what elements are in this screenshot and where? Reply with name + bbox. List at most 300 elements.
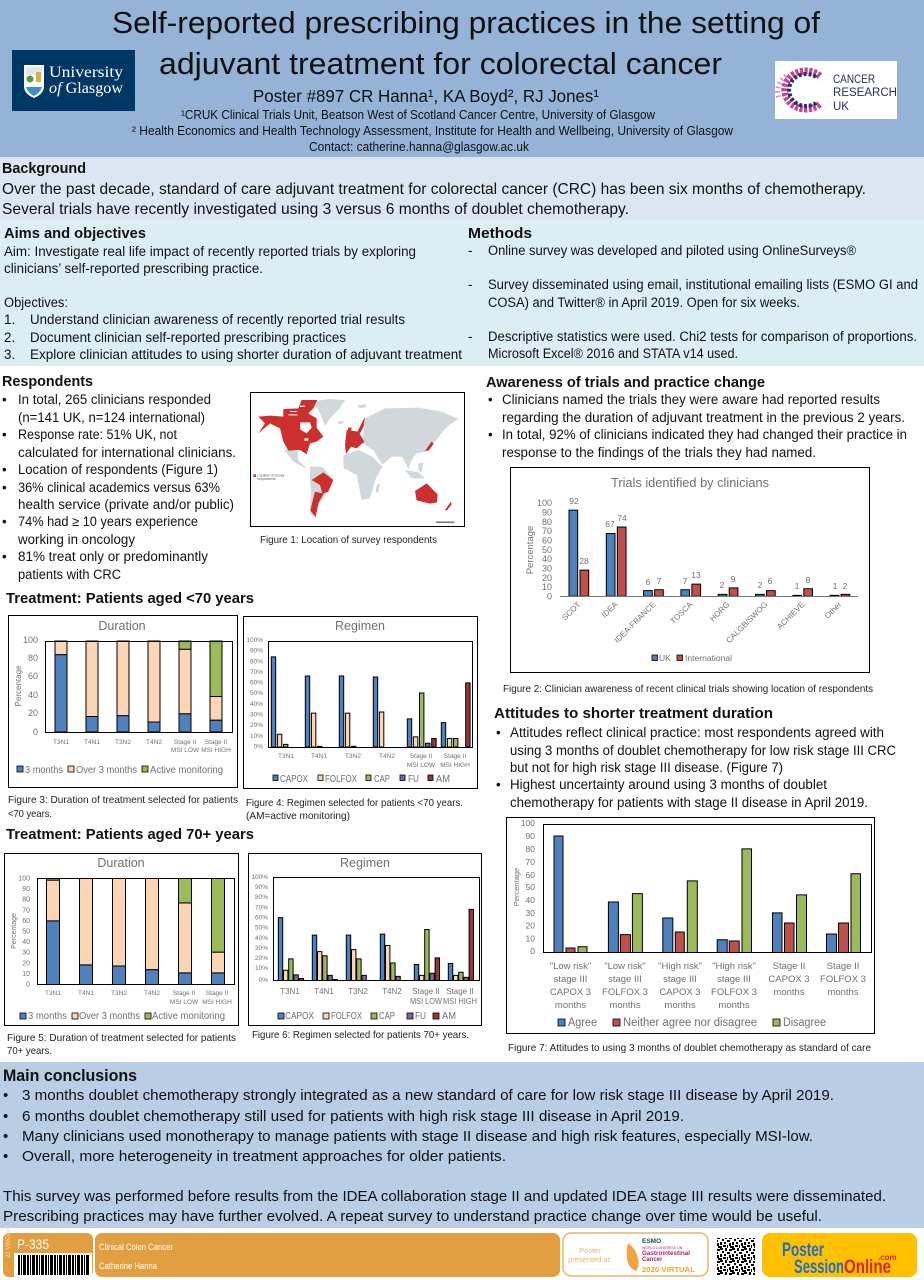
footer: PosterSessionOnline logo: .com: [878, 1253, 897, 1262]
figure 1: world map of respondents: [250, 392, 464, 526]
figure 3: duration under 70 stacked bars: [8, 616, 238, 788]
figure 1: world map of respondents: Location of survey: [257, 474, 285, 478]
figure 6: regimen 70 plus bars: 60%: [255, 915, 268, 922]
figure 5: duration 70 plus stacked bars: Active monitoring: [152, 1010, 225, 1022]
figure 7: attitudes bar chart: FOLFOX 3: [820, 974, 866, 985]
figure 2: trials identified bar chart: CALGB/SWOG: [724, 600, 769, 645]
figure 4: regimen under 70 bars: [244, 616, 478, 788]
panel: respondents: •: [2, 549, 7, 564]
panel: header band: [0, 0, 924, 157]
panel: awareness of trials and practice change: Awareness of trials and practice change: [486, 374, 765, 391]
figure 2: trials identified bar chart: 6: [646, 577, 651, 587]
figure 5: duration 70 plus stacked bars: 20: [22, 960, 30, 967]
figure 7: attitudes bar chart: months: [827, 987, 859, 998]
figure 4: regimen under 70 bars: FOLFOX: [325, 773, 357, 785]
figure 6: regimen 70 plus bars: 90%: [255, 884, 268, 891]
figure 7: attitudes bar chart: CAPOX 3: [768, 974, 810, 985]
panel: respondents: patients with CRC: [18, 567, 121, 582]
caption: figure 5: Figure 5: Duration of treatment selected for patients: [7, 1032, 236, 1044]
figure 7: attitudes bar chart: stage III: [717, 974, 751, 985]
figure 3: duration under 70 stacked bars: 100: [23, 635, 38, 645]
figure 2: trials identified bar chart: Other: [823, 600, 844, 621]
footer: session id and barcode: P-335: [17, 1237, 49, 1252]
panel: respondents: 81% treat only or predominantly: [18, 549, 208, 564]
figure 3: duration under 70 stacked bars: MSI LOW: [171, 747, 200, 754]
panel: main conclusions: •: [3, 1108, 8, 1125]
figure 2: trials identified bar chart: 30: [542, 564, 552, 574]
figure 7: attitudes bar chart: stage III: [554, 974, 587, 985]
figure 5: duration 70 plus stacked bars: T3N2: [111, 990, 127, 997]
figure 5: duration 70 plus stacked bars: 80: [22, 897, 30, 904]
caption: figure 3: Figure 3: Duration of treatment selected for patients: [8, 794, 238, 806]
figure 6: regimen 70 plus bars: T4N2: [382, 987, 402, 996]
figure 7: attitudes bar chart: 30: [526, 908, 535, 918]
methods: -: [468, 243, 472, 258]
figure 3: duration under 70 stacked bars: MSI HIGH: [201, 747, 231, 754]
figure 4: regimen under 70 bars: 30%: [250, 712, 263, 719]
figure 3: duration under 70 stacked bars: 20: [28, 708, 38, 718]
authors and affiliations: ² Health Economics and Health Technology Assessment, Institute for Health and Wellbeing, University of Glasgow: [132, 124, 734, 138]
figure 4: regimen under 70 bars: 0%: [254, 744, 263, 750]
panel: attitudes to shorter treatment duration: Highest uncertainty around using 3 months of doublet: [510, 777, 827, 792]
figure 2: trials identified bar chart: UK: [659, 653, 671, 663]
panel: respondents: 36% clinical academics versus 63%: [18, 480, 220, 495]
aims and objectives: 2.: [4, 330, 15, 345]
methods: COSA) and Twitter® in April 2019. Open for six weeks.: [488, 295, 800, 310]
figure 2: trials identified bar chart: IDEA-FRANCE: [613, 600, 657, 645]
figure 4: regimen under 70 bars: 70%: [250, 669, 263, 676]
methods: -: [468, 277, 472, 292]
panel: attitudes to shorter treatment duration: using 3 months of doublet chemotherapy for low risk stage III CRC: [510, 743, 896, 758]
figure 5: duration 70 plus stacked bars: 90: [22, 886, 30, 893]
methods: Survey disseminated using email, institutional emailing lists (ESMO GI and: [488, 277, 918, 292]
panel: awareness of trials and practice change: •: [488, 392, 493, 407]
panel: awareness of trials and practice change: In total, 92% of clinicians indicated they had changed their practice in: [502, 427, 907, 442]
figure 4: regimen under 70 bars: CAPOX: [280, 773, 308, 785]
figure 2: trials identified bar chart: 2: [843, 581, 848, 591]
figure 5: duration 70 plus stacked bars: Duration: [97, 856, 145, 870]
figure 7: attitudes bar chart: "Low risk": [604, 961, 646, 972]
figure 2: trials identified bar chart: 100: [537, 498, 552, 508]
figure 5: duration 70 plus stacked bars: 70: [22, 907, 30, 914]
figure 7: attitudes bar chart: stage III: [608, 974, 642, 985]
figure 5: duration 70 plus stacked bars: Percentage: [11, 913, 18, 949]
figure 2: trials identified bar chart: 74: [617, 513, 627, 523]
caption: figure 2: Figure 2: Clinician awareness of recent clinical trials showing location of respondents: [503, 683, 873, 695]
figure 4: regimen under 70 bars: FU: [408, 773, 419, 785]
panel: awareness of trials and practice change: response to the findings of the trials they had named.: [502, 445, 816, 460]
figure 3: duration under 70 stacked bars: Stage II: [205, 739, 227, 746]
footer: presented at congress badge: ESMO: [642, 1238, 661, 1245]
panel: main conclusions: •: [3, 1148, 8, 1165]
figure 6: regimen 70 plus bars: Stage II: [412, 987, 440, 996]
figure 2: trials identified bar chart: ACHIEVE: [775, 600, 806, 631]
figure 2: trials identified bar chart: 7: [657, 576, 662, 586]
figure 7: attitudes bar chart: 50: [526, 882, 535, 892]
figure 3: duration under 70 stacked bars: Percentage: [14, 665, 23, 706]
panel: attitudes to shorter treatment duration: [494, 705, 896, 810]
figure 6: regimen 70 plus bars: CAP: [379, 1010, 395, 1022]
figure 2: trials identified bar chart: [510, 468, 870, 672]
figure 4: regimen under 70 bars: 80%: [250, 658, 263, 665]
figure 5: duration 70 plus stacked bars: 30: [22, 950, 30, 957]
figure 7: attitudes bar chart: 70: [526, 857, 535, 867]
panel: main conclusions: Prescribing practices may have further evolved. A repeat survey to understand practice change over time would be useful.: [3, 1208, 822, 1225]
figure 5: duration 70 plus stacked bars: Stage II: [206, 990, 228, 997]
figure 2: trials identified bar chart: 7: [683, 576, 688, 586]
panel: respondents: [2, 373, 236, 582]
figure 6: regimen 70 plus bars: Regimen: [340, 856, 390, 870]
footer: PosterSessionOnline logo: Poster: [782, 1240, 824, 1261]
panel: main conclusions: This survey was performed before results from the IDEA collaboration stage II and updated IDEA stage III results were disseminated.: [3, 1188, 886, 1205]
title: [112, 5, 820, 81]
figure 2: trials identified bar chart: 1: [795, 581, 800, 591]
figure 7: attitudes bar chart: months: [773, 987, 805, 998]
figure 7: attitudes bar chart: 40: [526, 895, 535, 905]
logo: Cancer Research UK: RESEARCH: [833, 87, 897, 99]
figure 5: duration 70 plus stacked bars: 3 months: [28, 1010, 67, 1022]
methods: Online survey was developed and piloted using OnlineSurveys®: [488, 243, 856, 258]
authors and affiliations: ¹CRUK Clinical Trials Unit, Beatson West of Scotland Cancer Centre, University of Glasgow: [181, 108, 656, 122]
caption: figure 4: [246, 797, 463, 822]
figure 5: duration 70 plus stacked bars: Stage II: [173, 990, 195, 997]
heading: treatment under 70: Treatment: Patients aged <70 years: [6, 590, 254, 607]
figure 7: attitudes bar chart: stage III: [663, 974, 697, 985]
figure 7: attitudes bar chart: "High risk": [712, 961, 756, 972]
authors and affiliations: [132, 86, 734, 154]
footer: PosterSessionOnline logo: [762, 1233, 917, 1278]
title: Self-reported prescribing practices in the setting of: [112, 5, 820, 40]
figure 2: trials identified bar chart: 9: [731, 574, 736, 584]
footer: presented at congress badge: [563, 1233, 708, 1276]
figure 2: trials identified bar chart: 2: [758, 580, 763, 590]
aims and objectives: Understand clinician awareness of recently reported trial results: [30, 312, 405, 327]
aims and objectives: Aim: Investigate real life impact of recently reported trials by exploring: [4, 244, 416, 259]
caption: figure 3: [8, 794, 238, 820]
figure 7: attitudes bar chart: months: [664, 1000, 696, 1011]
panel: main conclusions: Many clinicians used monotherapy to manage patients with stage II disease and high risk features, especially MSI-low.: [22, 1128, 813, 1145]
figure 5: duration 70 plus stacked bars: 0: [26, 982, 30, 988]
figure 3: duration under 70 stacked bars: Over 3 months: [76, 764, 137, 776]
panel: awareness of trials and practice change: [486, 374, 907, 460]
panel: awareness of trials and practice change: •: [488, 427, 493, 442]
figure 3: duration under 70 stacked bars: Stage II: [174, 739, 196, 746]
figure 4: regimen under 70 bars: T4N2: [379, 753, 395, 760]
figure 5: duration 70 plus stacked bars: T4N2: [144, 990, 160, 997]
panel: main conclusions: •: [3, 1087, 8, 1104]
panel: main conclusions: Overall, more heterogeneity in treatment approaches for older patients.: [22, 1148, 506, 1165]
panel: attitudes to shorter treatment duration: but not for high risk stage III disease. (Figure 7): [510, 760, 783, 775]
heading: treatment 70 plus: Treatment: Patients aged 70+ years: [6, 826, 254, 843]
aims and objectives: Objectives:: [4, 295, 68, 310]
figure 2: trials identified bar chart: 2: [720, 580, 725, 590]
figure 2: trials identified bar chart: 80: [542, 517, 552, 527]
figure 7: attitudes bar chart: FOLFOX 3: [711, 987, 757, 998]
caption: figure 5: [7, 1032, 236, 1057]
figure 4: regimen under 70 bars: AM: [436, 773, 450, 785]
figure 3: duration under 70 stacked bars: T3N2: [115, 739, 131, 746]
figure 5: duration 70 plus stacked bars: 100: [18, 876, 30, 882]
figure 6: regimen 70 plus bars: 50%: [255, 925, 268, 932]
figure 7: attitudes bar chart: FOLFOX 3: [602, 987, 648, 998]
figure 4: regimen under 70 bars: 60%: [250, 680, 263, 687]
figure 4: regimen under 70 bars: Stage II: [410, 753, 432, 760]
figure 7: attitudes bar chart: Stage II: [773, 961, 805, 972]
figure 2: trials identified bar chart: 13: [691, 570, 701, 580]
aims and objectives: Document clinician self-reported prescribing practices: [30, 330, 346, 345]
figure 2: trials identified bar chart: 10: [542, 582, 552, 592]
figure 6: regimen 70 plus bars: 30%: [255, 945, 268, 952]
panel: awareness of trials and practice change: regarding the duration of adjuvant treatment in the previous 2 years.: [502, 410, 905, 425]
figure 7: attitudes bar chart: months: [555, 1000, 586, 1011]
caption: figure 4: Figure 4: Regimen selected for patients <70 years.: [246, 797, 463, 809]
logo: University of Glasgow: [12, 50, 135, 111]
figure 2: trials identified bar chart: 28: [579, 556, 589, 566]
panel: awareness of trials and practice change: Clinicians named the trials they were aware had reported results: [502, 392, 880, 407]
methods: Descriptive statistics were used. Chi2 tests for comparison of proportions.: [488, 329, 917, 344]
figure 7: attitudes bar chart: Percentage: [512, 868, 521, 906]
logo: Cancer Research UK: UK: [833, 101, 849, 113]
title: adjuvant treatment for colorectal cancer: [159, 46, 722, 81]
figure 5: duration 70 plus stacked bars: 50: [22, 928, 30, 936]
figure 4: regimen under 70 bars: Regimen: [335, 619, 385, 633]
figure 4: regimen under 70 bars: CAP: [374, 773, 390, 785]
figure 4: regimen under 70 bars: 40%: [250, 701, 263, 708]
panel: respondents: •: [2, 514, 7, 529]
footer: presented at congress badge: Gastrointestinal: [642, 1251, 690, 1257]
figure 4: regimen under 70 bars: T3N2: [345, 753, 361, 760]
figure 7: attitudes bar chart: 100: [521, 818, 535, 828]
panel: respondents: health service (private and/or public): [18, 497, 234, 512]
figure 2: trials identified bar chart: Percentage: [525, 526, 536, 574]
figure 2: trials identified bar chart: 40: [542, 554, 552, 564]
figure 7: attitudes bar chart: "Low risk": [550, 961, 591, 972]
figure 2: trials identified bar chart: TOSCA: [669, 600, 695, 626]
panel: respondents: •: [2, 392, 7, 407]
footer: PosterSessionOnline logo: Online: [844, 1257, 891, 1278]
figure 3: duration under 70 stacked bars: 3 months: [25, 764, 63, 776]
figure 2: trials identified bar chart: 20: [542, 573, 552, 583]
caption: figure 7: Figure 7: Attitudes to using 3 months of doublet chemotherapy as standard of care: [508, 1042, 871, 1054]
panel: attitudes to shorter treatment duration: Attitudes reflect clinical practice: most respondents agreed with: [510, 725, 884, 740]
figure 2: trials identified bar chart: HORG: [708, 600, 731, 623]
figure 6: regimen 70 plus bars: [248, 854, 482, 1026]
caption: figure 5: 70+ years.: [7, 1045, 52, 1057]
footer: session title and author: Catherine Hanna: [99, 1261, 157, 1271]
figure 6: regimen 70 plus bars: AM: [442, 1010, 456, 1022]
panel: main conclusions: 6 months doublet chemotherapy still used for patients with high risk stage III disease in April 2019.: [22, 1108, 684, 1125]
footer: session id and barcode: [3, 1224, 93, 1277]
figure 5: duration 70 plus stacked bars: MSI LOW: [170, 999, 199, 1006]
figure 5: duration 70 plus stacked bars: Over 3 months: [79, 1010, 140, 1022]
figure 6: regimen 70 plus bars: FU: [415, 1010, 426, 1022]
figure 6: regimen 70 plus bars: MSI HIGH: [443, 997, 477, 1006]
panel: attitudes to shorter treatment duration: •: [496, 725, 501, 740]
figure 3: duration under 70 stacked bars: Active monitoring: [150, 764, 223, 776]
logo: University of Glasgow: of Glasgow: [49, 80, 123, 97]
figure 3: duration under 70 stacked bars: T4N2: [146, 739, 162, 746]
panel: respondents: calculated for international clinicians.: [18, 445, 236, 460]
figure 3: duration under 70 stacked bars: 40: [28, 690, 38, 700]
figure 7: attitudes bar chart: months: [609, 1000, 641, 1011]
figure 6: regimen 70 plus bars: 40%: [255, 935, 268, 942]
figure 4: regimen under 70 bars: T4N1: [311, 753, 327, 760]
aims and objectives: 1.: [4, 312, 15, 327]
panel: respondents: working in oncology: [17, 532, 135, 547]
panel: aims and methods band: [0, 220, 924, 366]
figure 2: trials identified bar chart: 70: [542, 526, 552, 536]
figure 4: regimen under 70 bars: Stage II: [444, 753, 466, 760]
footer: presented at congress badge: 2020 VIRTUAL: [642, 1265, 695, 1274]
figure 7: attitudes bar chart: 90: [526, 831, 535, 841]
figure 7: attitudes bar chart: 10: [526, 934, 535, 944]
methods: Microsoft Excel® 2016 and STATA v14 used.: [488, 346, 738, 361]
figure 3: duration under 70 stacked bars: 60: [28, 671, 38, 681]
figure 6: regimen 70 plus bars: 70%: [255, 904, 268, 912]
figure 4: regimen under 70 bars: 100%: [246, 637, 263, 644]
footer: session id and barcode: 22 VWCGIC: [6, 1224, 12, 1258]
figure 7: attitudes bar chart: Disagree: [783, 1017, 826, 1029]
figure 7: attitudes bar chart: CAPOX 3: [550, 987, 591, 998]
panel: background: Over the past decade, standard of care adjuvant treatment for colorectal cancer (CRC) has been six months of chemotherapy.: [2, 181, 866, 198]
figure 2: trials identified bar chart: 0: [547, 592, 552, 602]
figure 5: duration 70 plus stacked bars: MSI HIGH: [202, 999, 232, 1006]
footer: presented at congress badge: presented at:: [568, 1255, 612, 1264]
aims and objectives: Aims and objectives: [4, 225, 146, 242]
figure 7: attitudes bar chart: Agree: [568, 1017, 597, 1029]
figure 2: trials identified bar chart: 1: [833, 581, 838, 591]
figure 2: trials identified bar chart: Trials identified by clinicians: [611, 476, 769, 490]
figure 1: world map of respondents: respondents: [257, 477, 276, 481]
figure 7: attitudes bar chart: 20: [526, 920, 535, 930]
panel: respondents: Respondents: [2, 373, 93, 390]
figure 5: duration 70 plus stacked bars: T4N1: [78, 990, 94, 997]
footer: QR code: [717, 1238, 755, 1275]
footer: session title and author: [95, 1233, 560, 1277]
panel: main conclusions: [0, 1062, 924, 1228]
caption: figure 3: <70 years.: [8, 808, 52, 820]
figure 3: duration under 70 stacked bars: 0: [33, 727, 38, 737]
figure 4: regimen under 70 bars: 20%: [250, 722, 263, 729]
panel: main conclusions: •: [3, 1128, 8, 1145]
figure 7: attitudes bar chart: Neither agree nor disagree: [623, 1017, 757, 1029]
figure 2: trials identified bar chart: SCOT: [560, 600, 582, 622]
figure 6: regimen 70 plus bars: T3N1: [280, 987, 300, 996]
figure 4: regimen under 70 bars: MSI LOW: [407, 762, 436, 769]
footer: presented at congress badge: Cancer: [642, 1257, 663, 1263]
figure 6: regimen 70 plus bars: CAPOX: [285, 1010, 314, 1022]
logo: Cancer Research UK: [775, 61, 897, 119]
figure 5: duration 70 plus stacked bars: T3N1: [45, 990, 61, 997]
figure 6: regimen 70 plus bars: 100%: [251, 874, 268, 881]
figure 3: duration under 70 stacked bars: T3N1: [53, 739, 69, 746]
methods: Methods: [468, 225, 532, 242]
caption: figure 4: (AM=active monitoring): [246, 810, 350, 822]
figure 5: duration 70 plus stacked bars: [4, 854, 238, 1026]
panel: respondents: Response rate: 51% UK, not: [18, 427, 177, 442]
figure 6: regimen 70 plus bars: T4N1: [314, 987, 334, 996]
caption: figure 1: Figure 1: Location of survey respondents: [260, 534, 437, 546]
panel: background: Background: [2, 160, 86, 177]
figure 4: regimen under 70 bars: 50%: [250, 690, 263, 697]
panel: background: Several trials have recently investigated using 3 versus 6 months of doublet chemotherapy.: [2, 201, 629, 218]
panel: attitudes to shorter treatment duration: •: [496, 777, 501, 792]
figure 2: trials identified bar chart: 8: [806, 575, 811, 585]
panel: main conclusions: Main conclusions: [3, 1067, 137, 1085]
figure 7: attitudes bar chart: 0: [530, 946, 535, 956]
figure 4: regimen under 70 bars: MSI HIGH: [440, 762, 470, 769]
caption: figure 6: Figure 6: Regimen selected for patients 70+ years.: [252, 1029, 469, 1041]
footer: presented at congress badge: Poster: [579, 1246, 601, 1255]
footer: session title and author: Clinical Colon Cancer: [99, 1242, 173, 1252]
figure 6: regimen 70 plus bars: FOLFOX: [331, 1010, 362, 1022]
figure 7: attitudes bar chart: CAPOX 3: [659, 987, 701, 998]
panel: respondents: 74% had ≥ 10 years experience: [18, 514, 198, 529]
panel: respondents: (n=141 UK, n=124 international): [18, 410, 205, 425]
figure 2: trials identified bar chart: International: [685, 653, 732, 663]
figure 6: regimen 70 plus bars: Stage II: [446, 987, 474, 996]
panel: respondents: Location of respondents (Figure 1): [18, 462, 218, 477]
figure 2: trials identified bar chart: 90: [542, 508, 552, 518]
aims and objectives: clinicians’ self-reported prescribing practice.: [4, 261, 263, 276]
panel: attitudes to shorter treatment duration: Attitudes to shorter treatment duration: [494, 705, 773, 722]
authors and affiliations: Poster #897 CR Hanna¹, KA Boyd², RJ Jones¹: [253, 86, 599, 106]
footer: presented at congress badge: WORLD CONGRESS ON: [642, 1246, 683, 1250]
figure 7: attitudes bar chart: Stage II: [827, 961, 859, 972]
panel: respondents: •: [2, 462, 7, 477]
methods: [468, 225, 918, 361]
figure 7: attitudes bar chart: "High risk": [658, 961, 702, 972]
logo: University of Glasgow: University: [49, 64, 123, 81]
logo: Cancer Research UK: CANCER: [833, 74, 875, 86]
panel: respondents: •: [2, 480, 7, 495]
panel: main conclusions: 3 months doublet chemotherapy strongly integrated as a new standard of care for low risk stage III disease by April 2019.: [22, 1087, 834, 1104]
figure 7: attitudes bar chart: months: [718, 1000, 750, 1011]
figure 7: attitudes bar chart: 80: [526, 844, 535, 854]
figure 6: regimen 70 plus bars: 10%: [255, 965, 268, 972]
figure 2: trials identified bar chart: 60: [542, 536, 552, 546]
figure 2: trials identified bar chart: 67: [605, 519, 615, 529]
figure 6: regimen 70 plus bars: 80%: [255, 894, 268, 901]
figure 4: regimen under 70 bars: 90%: [250, 648, 263, 655]
authors and affiliations: Contact: catherine.hanna@glasgow.ac.uk: [309, 140, 530, 154]
figure 3: duration under 70 stacked bars: T4N1: [84, 739, 100, 746]
figure 7: attitudes bar chart: 60: [526, 870, 535, 880]
figure 3: duration under 70 stacked bars: 80: [28, 653, 38, 663]
figure 7: attitudes bar chart: [506, 818, 874, 1034]
aims and objectives: 3.: [4, 347, 15, 362]
figure 4: regimen under 70 bars: T3N1: [278, 753, 294, 760]
figure 2: trials identified bar chart: IDEA: [600, 600, 620, 620]
figure 6: regimen 70 plus bars: MSI LOW: [410, 997, 442, 1006]
figure 6: regimen 70 plus bars: T3N2: [348, 987, 368, 996]
figure 5: duration 70 plus stacked bars: 60: [22, 918, 30, 925]
figure 2: trials identified bar chart: 92: [569, 496, 579, 506]
panel: respondents: In total, 265 clinicians responded: [18, 392, 211, 407]
panel: respondents: •: [2, 427, 7, 442]
figure 5: duration 70 plus stacked bars: 40: [22, 939, 30, 946]
figure 2: trials identified bar chart: 50: [542, 545, 552, 555]
aims and objectives: Explore clinician attitudes to using shorter duration of adjuvant treatment: [30, 347, 462, 362]
figure 6: regimen 70 plus bars: 0%: [259, 977, 268, 984]
figure 5: duration 70 plus stacked bars: 10: [22, 971, 30, 978]
aims and objectives: [4, 225, 462, 362]
figure 3: duration under 70 stacked bars: Duration: [98, 619, 146, 633]
panel: background: [0, 157, 924, 220]
methods: -: [468, 329, 472, 344]
figure 4: regimen under 70 bars: 10%: [250, 733, 263, 740]
figure 2: trials identified bar chart: 6: [768, 576, 773, 586]
